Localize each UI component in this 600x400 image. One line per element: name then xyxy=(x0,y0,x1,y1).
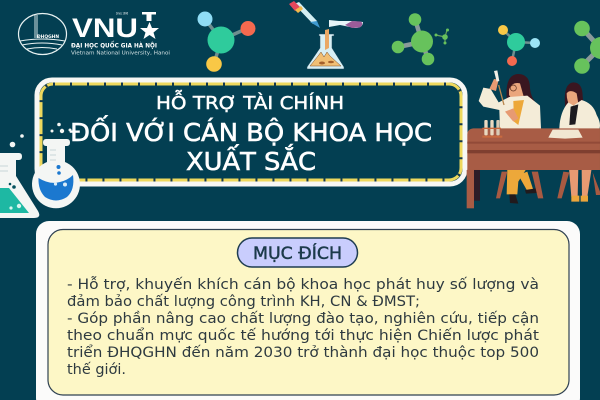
icon: blue flask xyxy=(32,139,80,208)
logo: VNU: ĐHQGHN xyxy=(37,34,59,40)
heading: support: HỖ TRỢ TÀI CHÍNH xyxy=(156,90,344,114)
text block: purpose body: - Hỗ trợ, khuyến khích cán bộ khoa học phát huy số lượng và xyxy=(67,276,539,293)
logo: VNU: ĐẠI HỌC QUỐC GIA HÀ NỘI xyxy=(71,42,157,50)
icon: lab flask with dropper xyxy=(289,1,363,69)
heading pill: purpose xyxy=(238,238,358,267)
icon: teal flask xyxy=(0,153,39,218)
table xyxy=(467,128,600,208)
panel: content card xyxy=(36,221,580,400)
icon: flask bubbles xyxy=(10,123,71,147)
panel: yellow box xyxy=(48,230,569,395)
person right xyxy=(557,82,600,202)
icon: molecule green cut off xyxy=(574,21,600,74)
logo: VNU xyxy=(18,12,170,56)
illustration: scientists at table xyxy=(467,70,600,208)
open book xyxy=(548,130,583,139)
test tube rack xyxy=(482,120,502,138)
icon: molecule small teal xyxy=(498,25,540,66)
text block: purpose body: thế giới. xyxy=(67,361,126,378)
icon: molecule green xyxy=(392,13,449,65)
logo: VNU: VNU xyxy=(72,13,138,43)
logo: VNU: Vietnam National University, Hanoi xyxy=(71,50,170,56)
heading: main line one: ĐỐI VỚI CÁN BỘ KHOA HỌC xyxy=(70,115,432,147)
logo: VNU: Since 1906 xyxy=(116,12,128,16)
heading: main line two: XUẤT SẮC xyxy=(186,144,316,176)
icon: molecule teal xyxy=(198,12,256,72)
text block: purpose body: - Góp phần nâng cao chất lượng đào tạo, nghiên cứu, tiếp cận xyxy=(67,310,539,327)
panel: title xyxy=(37,80,465,184)
text block: purpose body: đảm bảo chất lượng công trình KH, CN & ĐMST; xyxy=(67,294,420,310)
heading pill: purpose: MỤC ĐÍCH xyxy=(253,244,342,263)
text block: purpose body: theo chuẩn mực quốc tế hướng tới thực hiện Chiến lược phát xyxy=(67,327,539,344)
person left xyxy=(479,70,543,204)
text block: purpose body xyxy=(67,276,539,378)
text block: purpose body: triển ĐHQGHN đến năm 2030 trở thành đại học thuộc top 500 xyxy=(67,344,539,361)
